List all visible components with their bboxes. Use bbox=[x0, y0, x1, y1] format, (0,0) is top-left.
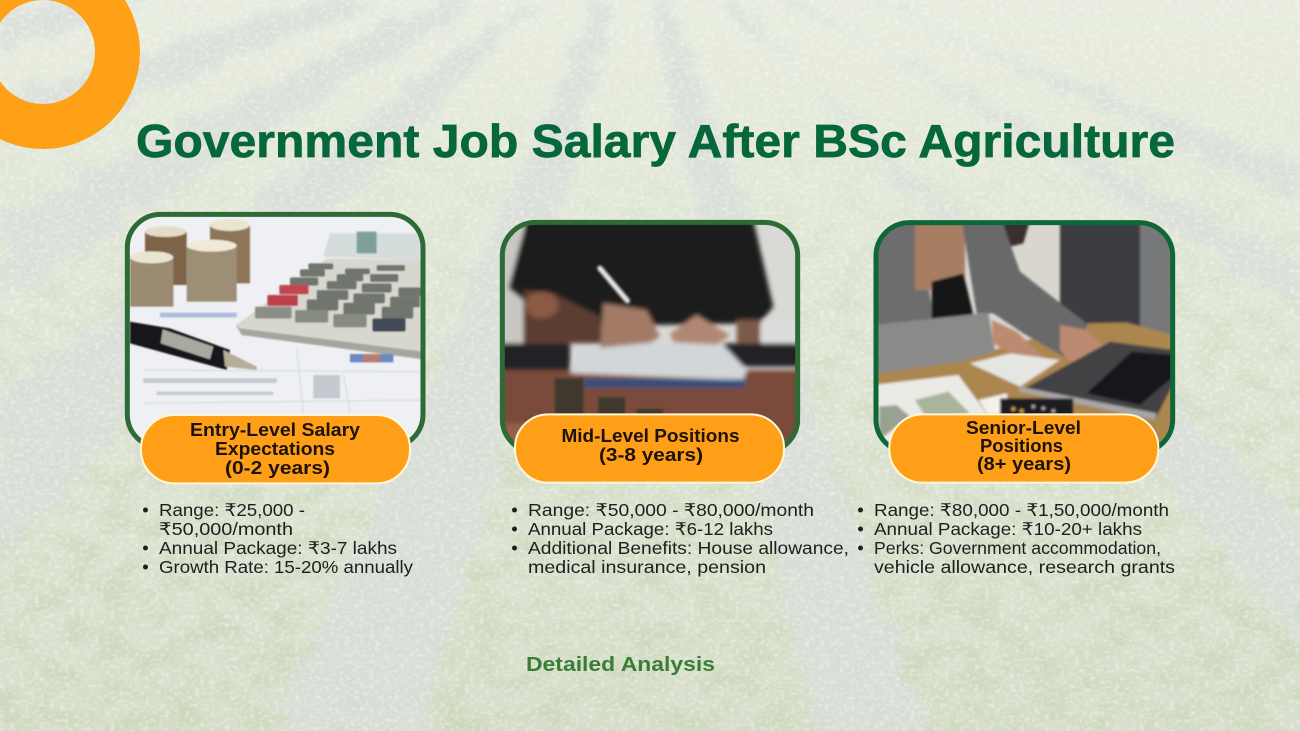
title: Government Job Salary After BSc Agriculture bbox=[136, 115, 1175, 167]
list: entry-level details: Annual Package: ₹3-7 lakhs bbox=[159, 538, 397, 558]
list: entry-level details bbox=[143, 500, 413, 577]
list: mid-level details bbox=[512, 500, 849, 577]
list: senior-level details: Range: ₹80,000 - ₹1,50,000/month bbox=[874, 500, 1169, 520]
label: mid-level heading bbox=[562, 425, 740, 465]
photo: coins, calculator and pen bbox=[123, 210, 427, 483]
photo: woman working on laptop bbox=[873, 220, 1177, 483]
list: senior-level details: Perks: Government accommodation, bbox=[874, 538, 1161, 558]
label: mid-level heading: (3-8 years) bbox=[599, 444, 703, 465]
label: senior-level heading: (8+ years) bbox=[977, 453, 1071, 474]
list: entry-level details: Range: ₹25,000 - bbox=[159, 500, 305, 520]
list: mid-level details: Range: ₹50,000 - ₹80,000/month bbox=[528, 500, 814, 520]
panel: entry-level salary bbox=[123, 210, 427, 577]
footer link: detailed analysis: Detailed Analysis bbox=[526, 654, 715, 676]
panel: senior-level positions bbox=[858, 220, 1177, 577]
list: entry-level details: ₹50,000/month bbox=[159, 519, 293, 539]
photo: person writing at desk bbox=[500, 220, 800, 483]
label: senior-level heading: Senior-Level bbox=[966, 417, 1081, 438]
label: senior-level heading bbox=[966, 417, 1081, 474]
label: mid-level heading: Mid-Level Positions bbox=[562, 425, 740, 446]
list: entry-level details: Growth Rate: 15-20% annually bbox=[159, 557, 413, 577]
label: entry-level heading: Entry-Level Salary bbox=[190, 419, 361, 440]
panel: mid-level positions bbox=[500, 220, 849, 577]
list: senior-level details bbox=[858, 500, 1175, 577]
label: entry-level heading: (0-2 years) bbox=[225, 457, 330, 478]
list: mid-level details: Annual Package: ₹6-12 lakhs bbox=[528, 519, 773, 539]
list: mid-level details: Additional Benefits: House allowance, bbox=[528, 538, 849, 558]
label: entry-level heading: Expectations bbox=[215, 438, 335, 459]
list: senior-level details: Annual Package: ₹10-20+ lakhs bbox=[874, 519, 1142, 539]
list: mid-level details: medical insurance, pension bbox=[528, 557, 766, 577]
label: senior-level heading: Positions bbox=[980, 435, 1063, 456]
list: senior-level details: vehicle allowance, research grants bbox=[874, 557, 1175, 577]
label: entry-level heading bbox=[190, 419, 361, 478]
decorative orange ring bbox=[0, 0, 118, 126]
